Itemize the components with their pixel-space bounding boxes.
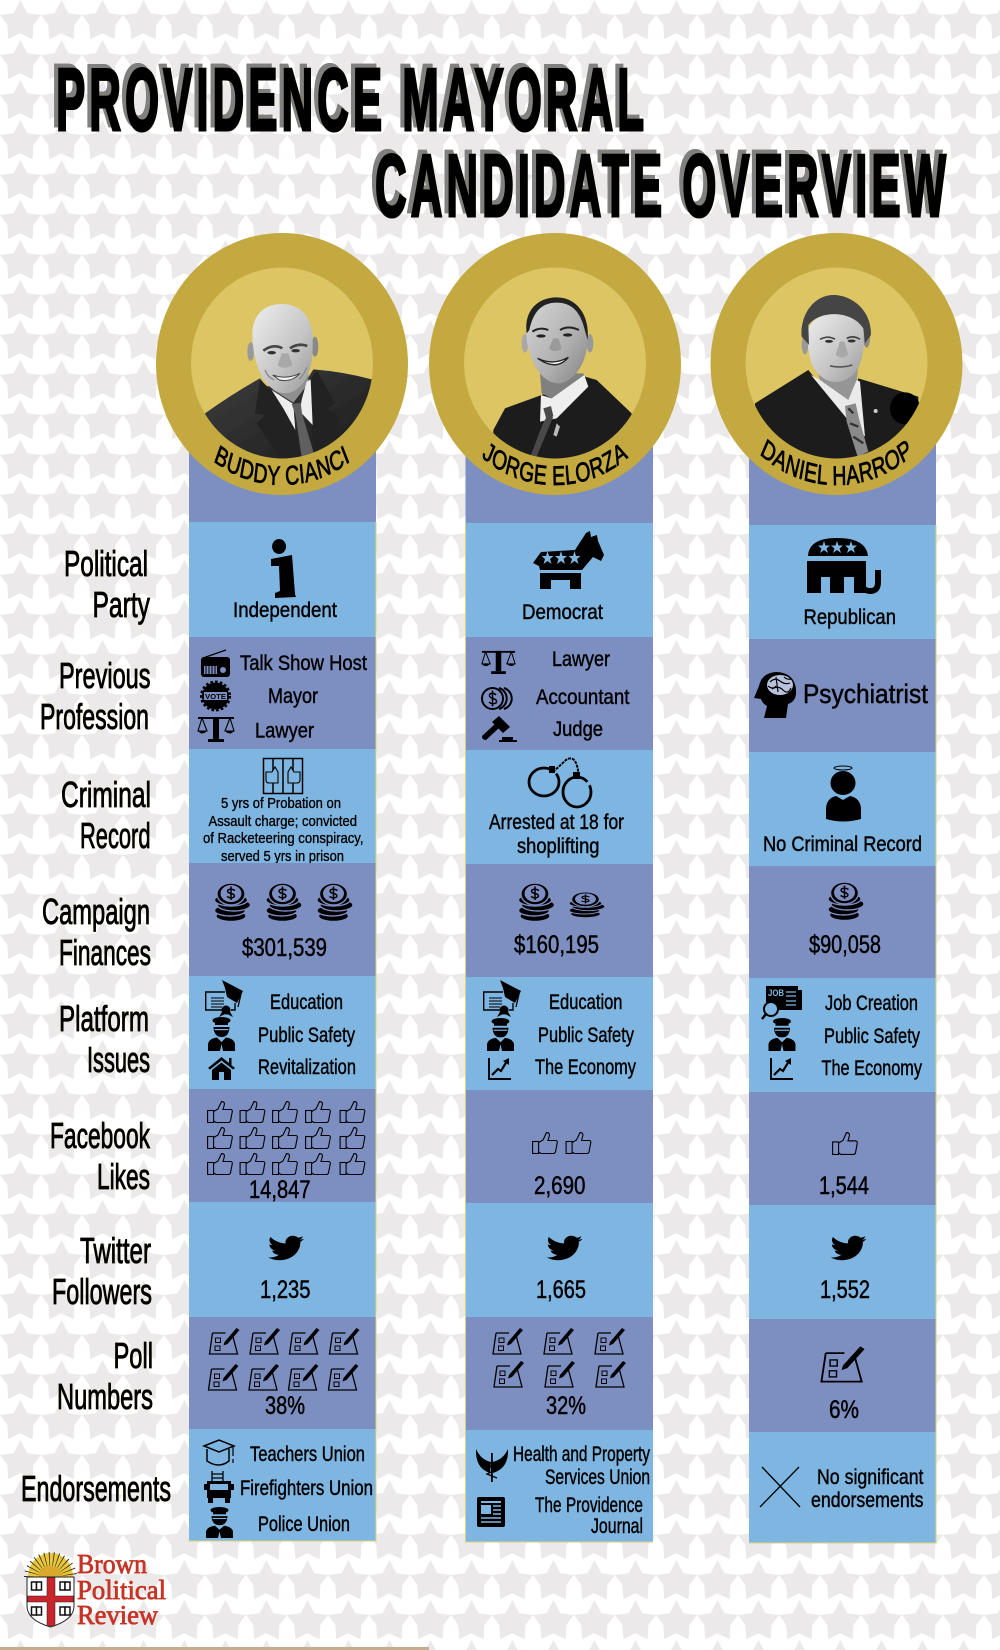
text: followers count: 1,552	[820, 1276, 870, 1304]
text: Health and Property Services Union: Services Union	[545, 1465, 650, 1489]
text: Judge: Judge	[553, 717, 603, 741]
logo: Brown Political Review	[27, 1549, 166, 1630]
text: Independent: Independent	[233, 598, 337, 622]
cell: criminal record	[466, 750, 653, 864]
cell: political party	[466, 523, 653, 637]
text: likes count: 1,544	[819, 1172, 869, 1200]
text: Health and Property Services Union	[513, 1442, 650, 1489]
text: Education: Education	[549, 990, 622, 1014]
icon: job search: JOB	[768, 988, 784, 998]
icon: diploma	[484, 980, 521, 1017]
icon: police officer	[487, 1018, 514, 1051]
row labels: Likes	[97, 1156, 150, 1197]
icon: graduation cap	[204, 1440, 234, 1466]
row labels: Facebook	[50, 1115, 151, 1156]
icon: house	[208, 1057, 235, 1080]
icon: cross mark	[760, 1467, 800, 1507]
text: Health and Property Services Union: Health and Property	[513, 1442, 650, 1466]
photo: Jorge Elorza	[493, 297, 632, 470]
icon: three coin stacks	[214, 883, 353, 922]
icon: eight ballots	[208, 1328, 360, 1390]
text: The Providence Journal: Journal	[591, 1514, 643, 1538]
text: Talk Show Host: Talk Show Host	[240, 651, 367, 675]
row labels: Campaign	[42, 891, 150, 932]
icon: gavel	[482, 716, 517, 742]
icon: vote badge: VOTE	[205, 692, 226, 701]
icon: twitter bird	[830, 1236, 866, 1260]
text: poll percent: 38%	[265, 1392, 305, 1420]
name: Jorge Elorza: JORGE ELORZA	[482, 443, 629, 486]
cell: campaign finances	[749, 866, 936, 978]
cell: facebook likes	[749, 1092, 936, 1205]
icon: growth chart	[771, 1058, 793, 1079]
text: Lawyer: Lawyer	[255, 718, 314, 742]
text: poll percent: 6%	[829, 1396, 859, 1424]
text: no significant endorsements: No significant	[817, 1465, 924, 1489]
text: likes count: 14,847	[249, 1176, 310, 1204]
cell: previous profession	[466, 637, 653, 750]
cell: political party	[749, 525, 936, 639]
row labels: Finances	[59, 932, 151, 973]
cell: campaign finances	[466, 864, 653, 977]
icon: ballot	[821, 1346, 865, 1382]
cell: criminal record	[749, 752, 936, 866]
name: Daniel Harrop: DANIEL HARROP	[760, 438, 908, 486]
icon: scales of justice	[482, 651, 515, 674]
row labels: Poll	[114, 1335, 153, 1376]
cell: twitter followers	[749, 1205, 936, 1319]
text: Republican: Republican	[804, 605, 896, 629]
text: Teachers Union: Teachers Union	[250, 1442, 365, 1466]
footer bar	[0, 1647, 429, 1650]
icon: person with halo	[826, 766, 861, 822]
text: Democrat: Democrat	[522, 600, 603, 624]
text: criminal record details: 5 yrs of Probation on	[221, 795, 341, 812]
icon: six ballots	[493, 1328, 626, 1387]
text: Firefighters Union: Firefighters Union	[240, 1476, 373, 1500]
icon: republican elephant	[807, 538, 878, 593]
text: The Providence Journal	[535, 1493, 643, 1538]
text: likes count: 2,690	[534, 1172, 586, 1200]
icon: police officer	[206, 1507, 233, 1538]
icon: twitter bird	[268, 1236, 304, 1260]
icon: diploma	[206, 980, 243, 1017]
icon: head with brain	[754, 672, 796, 718]
icon: fire truck	[204, 1471, 234, 1503]
photo: Daniel Harrop	[755, 295, 920, 470]
cell: poll numbers	[749, 1319, 936, 1432]
text: logo wordmark	[77, 1549, 166, 1630]
title	[56, 50, 950, 235]
row labels: Issues	[87, 1039, 150, 1080]
icon: stacked dollar coins	[482, 688, 512, 709]
cell: endorsements	[749, 1432, 936, 1543]
text: Education: Education	[270, 990, 343, 1014]
icon: information i	[271, 539, 296, 598]
row labels: Previous	[59, 655, 150, 696]
text: Job Creation: Job Creation	[825, 991, 918, 1015]
name: Buddy Cianci: BUDDY CIANCI	[214, 445, 350, 486]
photo: Buddy Cianci	[205, 304, 372, 470]
text: Public Safety: Public Safety	[824, 1024, 920, 1048]
text: logo wordmark: Political	[77, 1575, 166, 1605]
icon: job search	[762, 986, 802, 1019]
icon: thumb	[833, 1133, 857, 1154]
cell: poll numbers	[466, 1317, 653, 1430]
text: The Economy: The Economy	[535, 1055, 636, 1079]
portrait badge: Jorge Elorza	[429, 233, 681, 495]
row labels: Record	[80, 815, 150, 856]
icon: growth chart	[489, 1058, 511, 1079]
icon: police officer	[208, 1017, 235, 1051]
text: logo wordmark: Brown	[77, 1549, 147, 1579]
column: Daniel Harrop	[749, 440, 936, 1543]
text: Public Safety: Public Safety	[258, 1023, 355, 1047]
cell: platform issues	[189, 976, 376, 1089]
icon: handcuffs	[529, 758, 591, 807]
column: Buddy Cianci	[189, 440, 376, 1541]
text: arrest details	[489, 810, 624, 858]
text: followers count: 1,235	[260, 1276, 310, 1304]
text: funds: $160,195	[514, 931, 599, 959]
cell: platform issues	[466, 977, 653, 1090]
row labels: Endorsements	[21, 1468, 171, 1509]
text: criminal record details: Assault charge; convicted	[208, 813, 357, 830]
text: criminal record details: of Racketeering conspiracy,	[203, 830, 364, 847]
icon: coin stack	[828, 882, 864, 920]
text: Lawyer: Lawyer	[552, 647, 610, 671]
cell: criminal record	[189, 749, 376, 865]
cell: twitter followers	[466, 1203, 653, 1317]
text: Public Safety: Public Safety	[538, 1023, 634, 1047]
cell: campaign finances	[189, 863, 376, 976]
text: poll percent: 32%	[546, 1392, 586, 1420]
cell: endorsements	[189, 1429, 376, 1541]
portrait badge: Daniel Harrop	[710, 233, 962, 495]
text: criminal record details	[203, 795, 364, 865]
icon: newspaper	[477, 1497, 505, 1527]
icon: radio	[201, 650, 230, 677]
row labels	[21, 543, 171, 1509]
icon: jail bars with thumbs	[264, 758, 302, 794]
icon: democratic donkey	[533, 531, 604, 589]
text: no significant endorsements	[811, 1465, 924, 1512]
text: arrest details: shoplifting	[517, 834, 600, 858]
row labels: Criminal	[61, 774, 151, 815]
text: logo wordmark: Review	[77, 1600, 158, 1630]
icon: sun over shield	[28, 1553, 73, 1577]
text: Mayor: Mayor	[268, 684, 318, 708]
icon: scales of justice	[198, 717, 234, 742]
text: criminal record details: served 5 yrs in prison	[221, 848, 344, 865]
cell: previous profession	[189, 637, 376, 749]
text: Psychiatrist: Psychiatrist	[803, 679, 928, 709]
cell: twitter followers	[189, 1202, 376, 1317]
text: No Criminal Record: No Criminal Record	[763, 832, 922, 856]
text: The Providence Journal: The Providence	[535, 1493, 643, 1517]
icon: police officer	[768, 1018, 796, 1051]
text: funds: $90,058	[809, 931, 881, 959]
cell: endorsements	[466, 1430, 653, 1542]
icon: vote badge	[202, 682, 229, 710]
row labels: Profession	[40, 696, 149, 737]
cell: facebook likes	[466, 1090, 653, 1203]
text: funds: $301,539	[242, 934, 327, 962]
text: The Economy: The Economy	[822, 1056, 922, 1080]
portrait badge: Buddy Cianci	[156, 233, 408, 495]
row labels: Numbers	[57, 1376, 153, 1417]
text: arrest details: Arrested at 18 for	[489, 810, 624, 834]
cell: poll numbers	[189, 1317, 376, 1429]
icon: shield with cross and books	[27, 1577, 74, 1627]
text: no significant endorsements: endorsements	[811, 1488, 924, 1512]
icon: caduceus	[476, 1449, 508, 1482]
column: Jorge Elorza	[466, 440, 653, 1542]
row labels: Platform	[59, 998, 149, 1039]
text: followers count: 1,665	[536, 1276, 586, 1304]
text: Revitalization: Revitalization	[258, 1055, 356, 1079]
cell: previous profession	[749, 639, 936, 752]
icon: twitter bird	[546, 1236, 582, 1260]
text: Accountant: Accountant	[536, 685, 630, 709]
cell: platform issues	[749, 978, 936, 1092]
icon: coin stacks	[518, 883, 605, 922]
row labels: Political	[64, 543, 148, 584]
row labels: Party	[92, 584, 150, 625]
row labels: Followers	[52, 1271, 152, 1312]
row labels: Twitter	[80, 1230, 151, 1271]
cell: facebook likes	[189, 1089, 376, 1204]
icon: grid of thumbs	[208, 1102, 365, 1174]
cell: political party	[189, 522, 376, 637]
text: Police Union: Police Union	[258, 1512, 350, 1536]
icon: two thumbs	[533, 1133, 591, 1154]
